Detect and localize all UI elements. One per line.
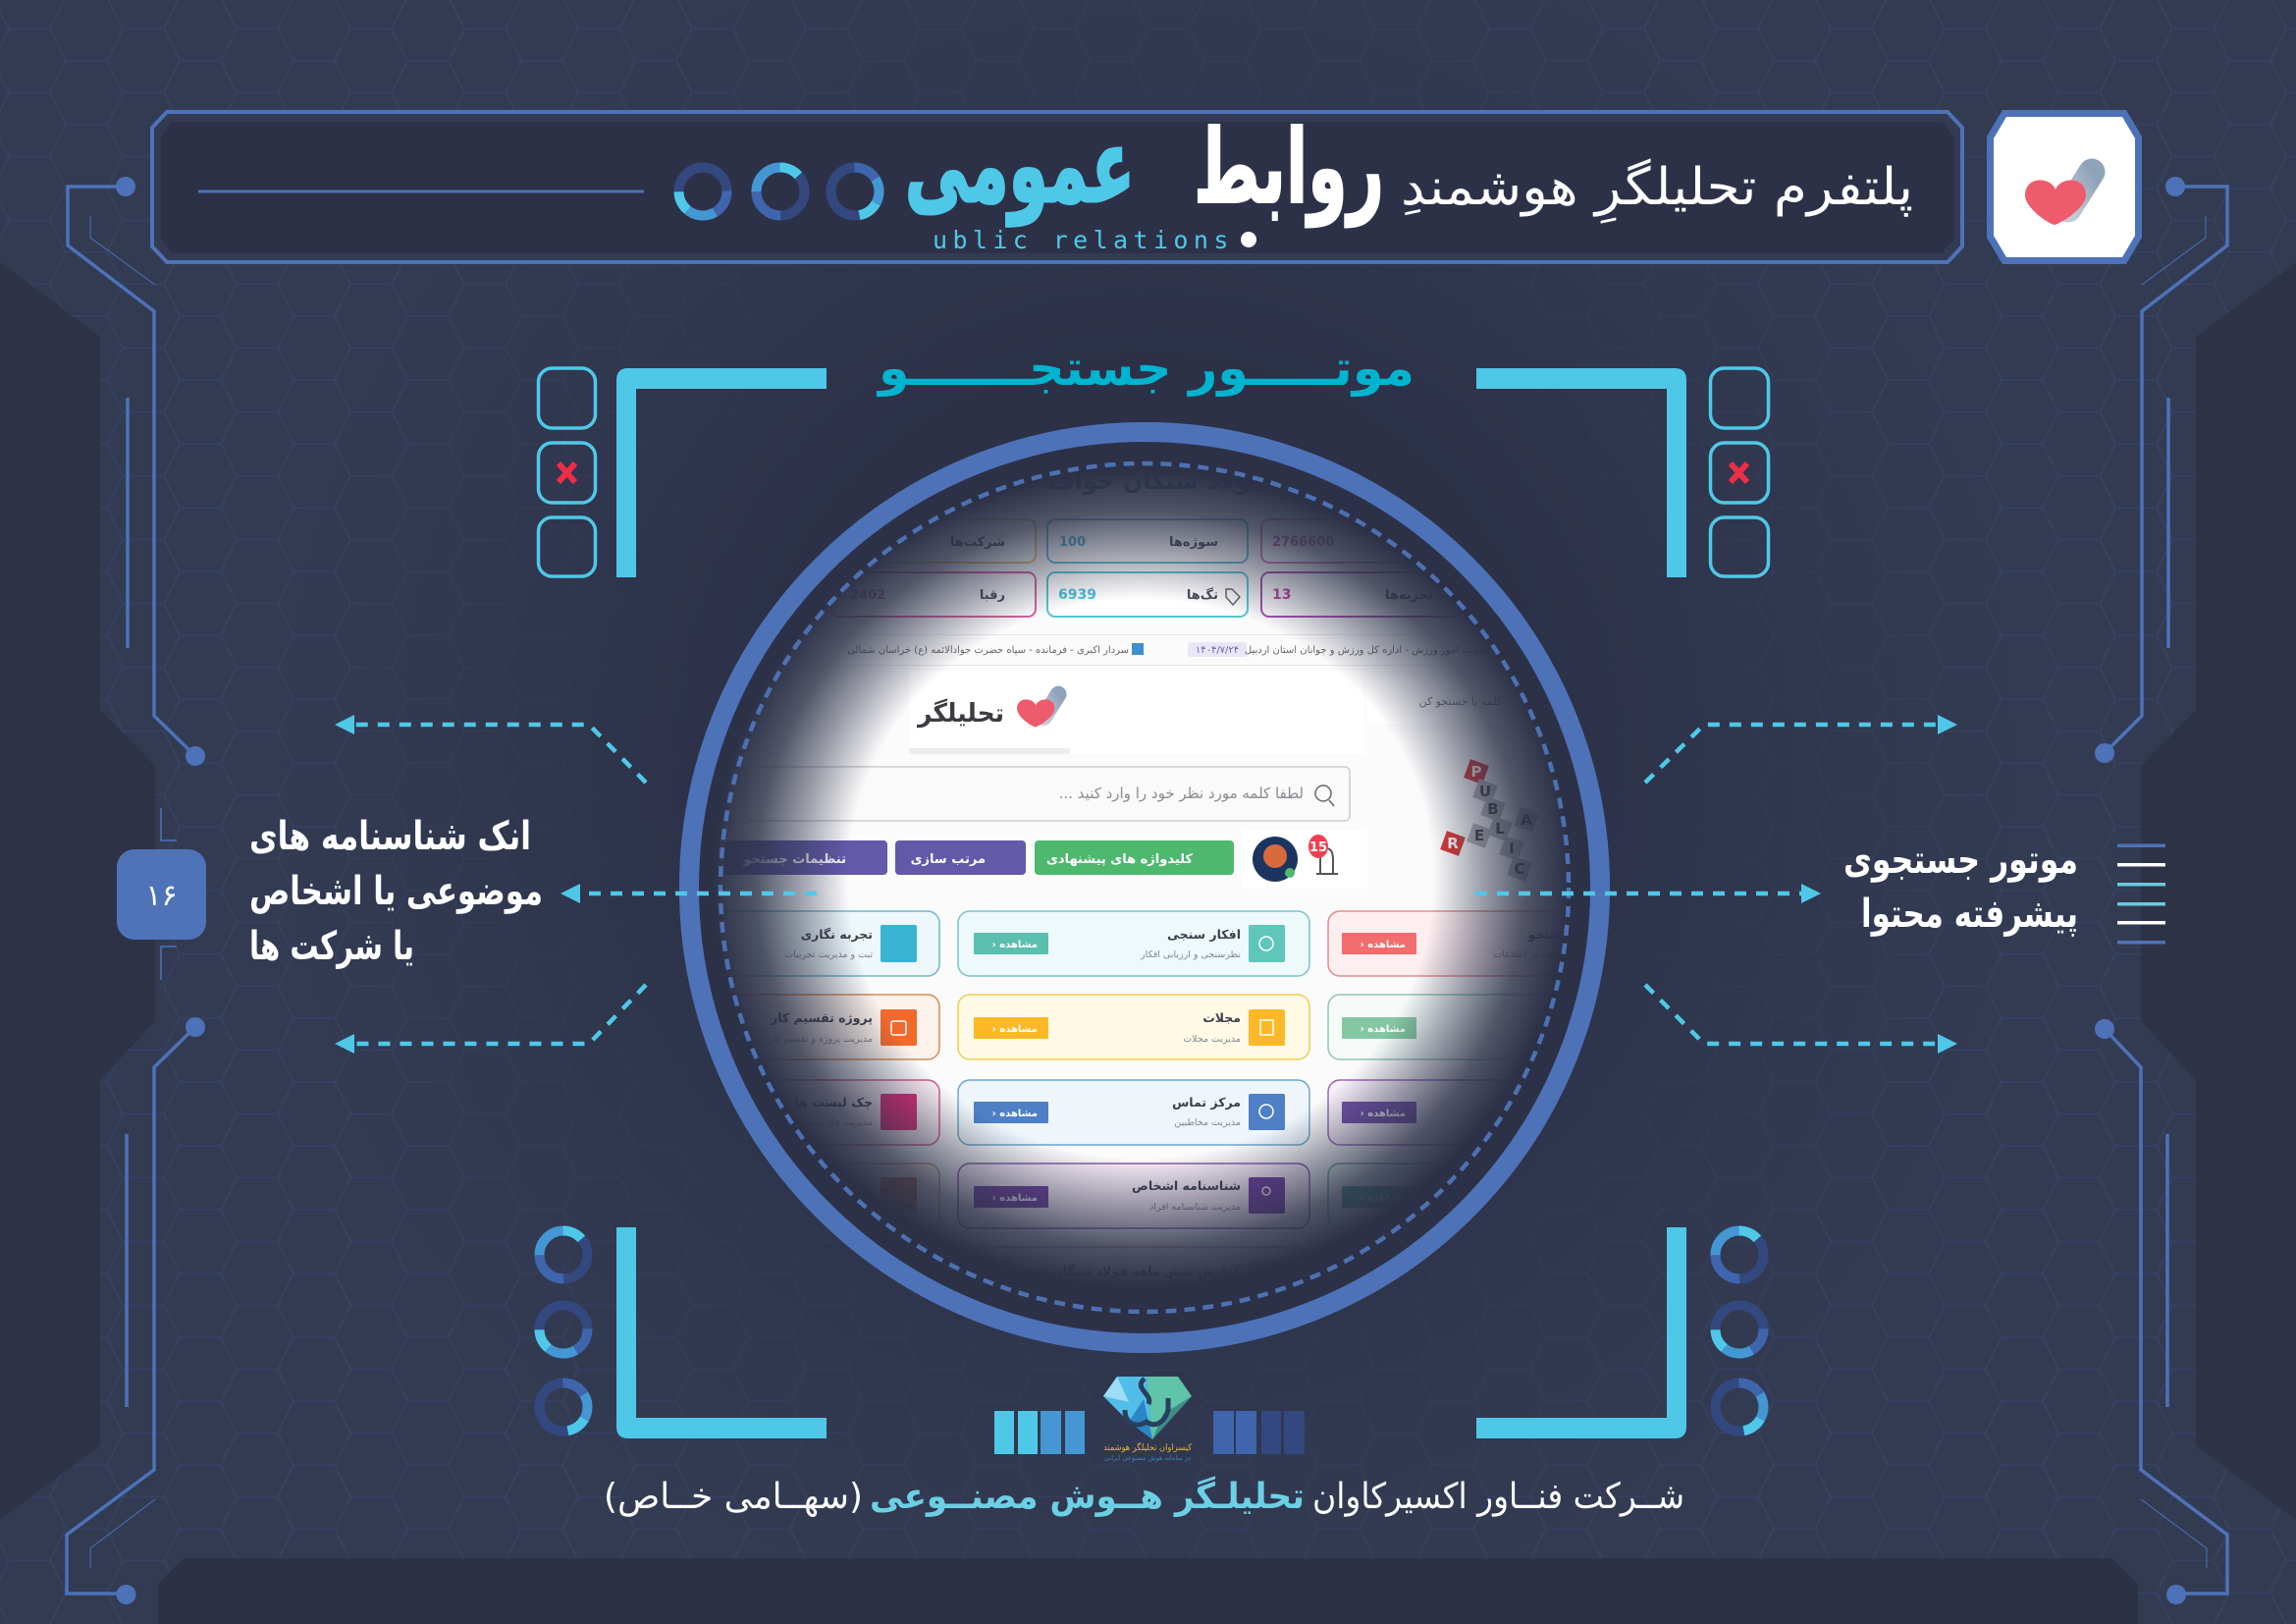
ticker: ۱۴۰۴/۷/۲۴ — [1196, 645, 1239, 656]
row 2 cards: مدیریت مجلات — [1183, 1034, 1241, 1045]
row 1 cards: افکار سنجی — [1167, 927, 1241, 942]
brand in screenshot — [916, 694, 1058, 729]
arrow middle left — [561, 884, 817, 903]
ticker: سردار اکبری - فرمانده - سپاه حضرت جوادالائمه (ع) خراسان شمالی — [847, 645, 1129, 656]
bottom bars right — [1213, 1411, 1305, 1454]
logotype: public relations: ublic relations — [933, 226, 1234, 254]
logotype: public relations — [905, 106, 1384, 254]
row 1 cards: ثبت و مدیریت تجربیات — [784, 949, 873, 960]
row 2 cards: مدیریت گزارشات — [1541, 1033, 1610, 1045]
screenshot content: سوژه‌ها — [1169, 535, 1218, 550]
lens dashed ring — [721, 463, 1569, 1312]
row 1 cards: نظرسنجی و ارزیابی افکار — [1140, 949, 1241, 960]
top corner brackets — [616, 368, 1686, 577]
section heading: موتـــــور جستجـــــــو — [876, 340, 1415, 398]
magnifier lens with platform screenshot — [679, 422, 1610, 1353]
row 5 card — [1003, 1246, 1279, 1277]
screenshot content: 2766600 — [1272, 535, 1334, 550]
row 2 cards: مدیریت پروژه و تقسیم کار — [768, 1034, 873, 1045]
ticker: معاونت امور ورزش - اداره کل ورزش و جوانان استان اردبیل — [1245, 645, 1492, 656]
arrow middle right — [1475, 884, 1821, 903]
number badge — [117, 808, 206, 980]
right caption — [1843, 838, 2078, 937]
row 2 cards: مشاهده ‹ — [1361, 1024, 1406, 1035]
right caption: موتور جستجوی — [1843, 838, 2078, 883]
header rule — [198, 190, 644, 192]
row 2 cards: مشاهده ‹ — [622, 1024, 667, 1035]
left caption: موضوعی یا اشخاص — [249, 869, 543, 914]
row 2 cards: پروژه تقسیم کار — [770, 1010, 873, 1025]
lens fade — [677, 422, 1620, 1355]
ring column left — [540, 1231, 587, 1432]
left caption — [249, 814, 543, 969]
footer company name — [604, 1476, 1684, 1517]
word tiles: U — [1479, 783, 1491, 800]
bottom corner brackets — [616, 1227, 1686, 1438]
circuit line top right — [2095, 177, 2227, 763]
left caption: یا شرکت ها — [249, 924, 414, 969]
company logo gem: در سامانه هوش مصنوعی ایرانی — [1104, 1454, 1191, 1462]
footer company name: تحلیلـگر هــوش مصنــوعی — [870, 1476, 1305, 1517]
row 4 cards: شناسنامه — [815, 1178, 873, 1193]
screenshot content — [699, 442, 1590, 1333]
row 1 cards — [728, 910, 1553, 977]
screenshot content: تگ‌ها — [1187, 587, 1218, 603]
row 4 cards: مدیریت شناسنامه افراد — [1149, 1202, 1241, 1213]
icon: red cross — [559, 463, 575, 482]
row 2 cards: مشاهده ‹ — [992, 1024, 1038, 1035]
circuit line top left — [68, 177, 205, 766]
number badge: ۱۶ — [145, 879, 178, 913]
right caption: پیشرفته محتوا — [1861, 892, 2078, 937]
row 1 cards: جستجوی پیشرفته در اطلاعات — [1493, 949, 1610, 960]
screenshot content: تجربه‌ها — [1385, 588, 1433, 603]
screenshot content: 6939 — [1058, 587, 1096, 603]
action buttons: مرتب سازی — [911, 852, 986, 867]
checkbox column left — [538, 368, 595, 576]
row 3 cards: مشاهده ‹ — [1361, 1109, 1406, 1119]
action buttons: تنظیمات جستجو — [742, 852, 846, 867]
row 2 cards: مجلات — [1202, 1010, 1241, 1025]
word tiles: R — [1447, 835, 1459, 852]
ring column right — [1716, 1231, 1763, 1432]
bottom bars left — [994, 1411, 1085, 1454]
brand in screenshot: تحلیلگر — [916, 698, 1004, 729]
row 1 cards: مشاهده ‹ — [992, 940, 1038, 950]
row 4 cards: مشاهده ‹ — [992, 1193, 1038, 1204]
company logo gem: کیسزاوان تحلیلگر هوشمند — [1103, 1441, 1193, 1453]
icon: red cross — [1731, 463, 1747, 482]
row 3 cards: مشاهده ‹ — [622, 1109, 667, 1119]
action buttons: 15 — [1309, 840, 1327, 855]
row 4 cards: مشاهده ‹ — [1361, 1193, 1406, 1204]
row 5 card: گزارش و تحلیل اطلاعات — [1145, 1287, 1241, 1299]
logo box with heart check — [1991, 114, 2138, 261]
word tiles: P — [1470, 763, 1482, 781]
search box: لطفا کلمه مورد نظر خود را وارد کنید ... — [1059, 785, 1304, 802]
logotype: public relations: روابط — [1194, 107, 1384, 228]
row 3 cards: مدیریت چک لیست ها — [789, 1117, 873, 1128]
row 3 cards — [782, 1079, 1498, 1146]
arrow upper left — [335, 715, 646, 783]
arrow lower left — [335, 985, 646, 1054]
circuit line bottom right — [2095, 1019, 2227, 1604]
screenshot content: 2402 — [850, 588, 885, 603]
screenshot content: شرکت‌ها — [950, 535, 1005, 550]
row 3 cards: چک لیست ها — [794, 1095, 873, 1110]
row 4 cards: شناسنامه اشخاص — [1132, 1178, 1241, 1193]
row 5 card: گزارش شش ماهه فولاد سنگان — [1052, 1264, 1242, 1278]
word tiles: E — [1474, 827, 1484, 844]
word tiles — [1440, 759, 1539, 882]
word tiles: C — [1514, 860, 1525, 878]
right decorative bars — [2117, 844, 2165, 945]
arrow upper right — [1645, 715, 1957, 783]
screenshot content: رقبا — [980, 588, 1005, 603]
search box — [746, 767, 1350, 821]
screenshot content: کلمه یا جستجو کن — [1419, 695, 1503, 708]
row 2 cards — [742, 994, 1532, 1060]
left caption: انک شناسنامه های — [249, 814, 531, 859]
row 1 cards: موتور جستجو — [1527, 927, 1610, 942]
row 3 cards: مرکز تماس — [1172, 1095, 1241, 1110]
row 1 cards: تجربه نگاری — [801, 927, 873, 942]
action buttons — [724, 835, 1338, 882]
checkbox column right — [1710, 368, 1769, 576]
word tiles: B — [1487, 800, 1499, 818]
circuit line bottom left — [67, 1017, 205, 1604]
logotype: public relations: عمومی — [905, 106, 1135, 226]
action buttons: کلیدواژه های پیشنهادی — [1046, 852, 1193, 867]
header banner — [152, 106, 1962, 262]
screenshot content: فولاد سنگان خواف — [1047, 467, 1266, 495]
row 1 cards: مشاهده ‹ — [1361, 940, 1406, 950]
footer company name: شــرکت فنــاور اکسیرکاوان — [1312, 1477, 1684, 1517]
word tiles: I — [1509, 839, 1515, 857]
row 3 cards: مشاهده ‹ — [992, 1109, 1038, 1119]
footer company name: (سهــامی خــاص) — [604, 1477, 863, 1517]
row 1 cards: مشاهده ‹ — [622, 940, 667, 950]
header title: پلتفرم تحلیلگرِ هوشمندِ — [1401, 158, 1913, 225]
word tiles: A — [1521, 811, 1532, 829]
screenshot content: 13 — [1272, 587, 1291, 603]
screenshot content: 100 — [1059, 535, 1086, 550]
row 4 cards — [851, 1163, 1429, 1229]
row 2 cards: گزارشات — [1555, 1010, 1611, 1025]
row 3 cards: مدیریت مخاطبین — [1174, 1117, 1241, 1128]
search area card — [909, 671, 1364, 754]
arrow lower right — [1645, 985, 1957, 1054]
company logo gem — [1103, 1377, 1193, 1462]
header rings — [679, 167, 880, 216]
lens outer ring — [689, 432, 1600, 1343]
stat cards — [831, 519, 1462, 617]
ticker — [848, 634, 1480, 666]
word tiles: L — [1495, 820, 1505, 838]
